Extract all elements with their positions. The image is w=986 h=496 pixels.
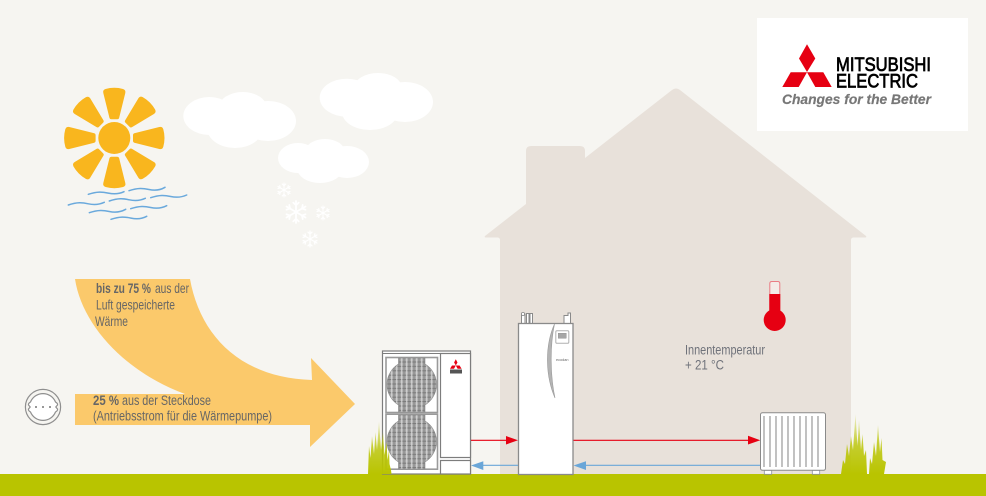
arrow: red flow to radiator bbox=[574, 436, 760, 444]
cloud: lower bbox=[278, 139, 369, 183]
text: 75 percent air heat: aus der bbox=[155, 281, 189, 296]
ground bbox=[0, 474, 986, 496]
logo tagline: Changes for the Better bbox=[782, 91, 933, 107]
product label: ecodan bbox=[556, 358, 568, 362]
logo wordmark second line: ELECTRIC bbox=[836, 71, 918, 92]
arrow: blue return to outdoor unit bbox=[471, 461, 518, 470]
text: 75 percent air heat bbox=[95, 281, 189, 329]
text: 25 percent from socket: 25 % bbox=[93, 393, 119, 408]
indoor hydro unit bbox=[518, 312, 573, 474]
icon: power socket bbox=[25, 389, 61, 425]
arrow: blue return to indoor unit bbox=[574, 461, 760, 470]
text: indoor temperature: Innentemperatur bbox=[685, 343, 765, 358]
front panel curve bbox=[547, 324, 555, 398]
icon: heat waves bbox=[68, 187, 187, 219]
bottom panel bbox=[440, 460, 470, 474]
side panel bbox=[440, 354, 470, 458]
arrow: combined energy flow bbox=[75, 279, 355, 447]
cloud: left bbox=[183, 92, 296, 148]
text: indoor temperature bbox=[685, 343, 765, 372]
text: 25 percent from socket bbox=[93, 393, 272, 424]
lower fan bbox=[386, 414, 438, 469]
icon: sun bbox=[64, 88, 164, 188]
upper fan bbox=[386, 358, 438, 412]
text: 25 percent from socket: aus der Steckdose bbox=[122, 393, 211, 408]
icon: thermometer bbox=[764, 282, 786, 331]
cloud: right bbox=[320, 73, 433, 130]
grass: right bbox=[841, 414, 886, 474]
text: 75 percent air heat: Wärme bbox=[95, 314, 128, 329]
logo: Mitsubishi Electric bbox=[757, 18, 968, 131]
text: indoor temperature: + 21 °C bbox=[685, 358, 724, 372]
logo mark: three red diamonds bbox=[782, 44, 832, 87]
icon: snowflakes bbox=[277, 183, 330, 247]
unit badge bbox=[450, 359, 462, 374]
arrow: red flow to indoor unit bbox=[471, 436, 518, 444]
logo wordmark: MITSUBISHI bbox=[836, 55, 931, 76]
outdoor heat pump unit bbox=[382, 351, 470, 474]
text: 75 percent air heat: Luft gespeicherte bbox=[96, 298, 175, 312]
radiator bbox=[760, 413, 826, 474]
grass: left bbox=[368, 421, 392, 474]
house silhouette bbox=[485, 88, 866, 474]
text: 75 percent air heat: bis zu 75 % bbox=[96, 281, 151, 296]
text: 25 percent from socket: (Antriebsstrom für die Wärmepumpe) bbox=[93, 408, 272, 424]
control display bbox=[556, 331, 569, 343]
